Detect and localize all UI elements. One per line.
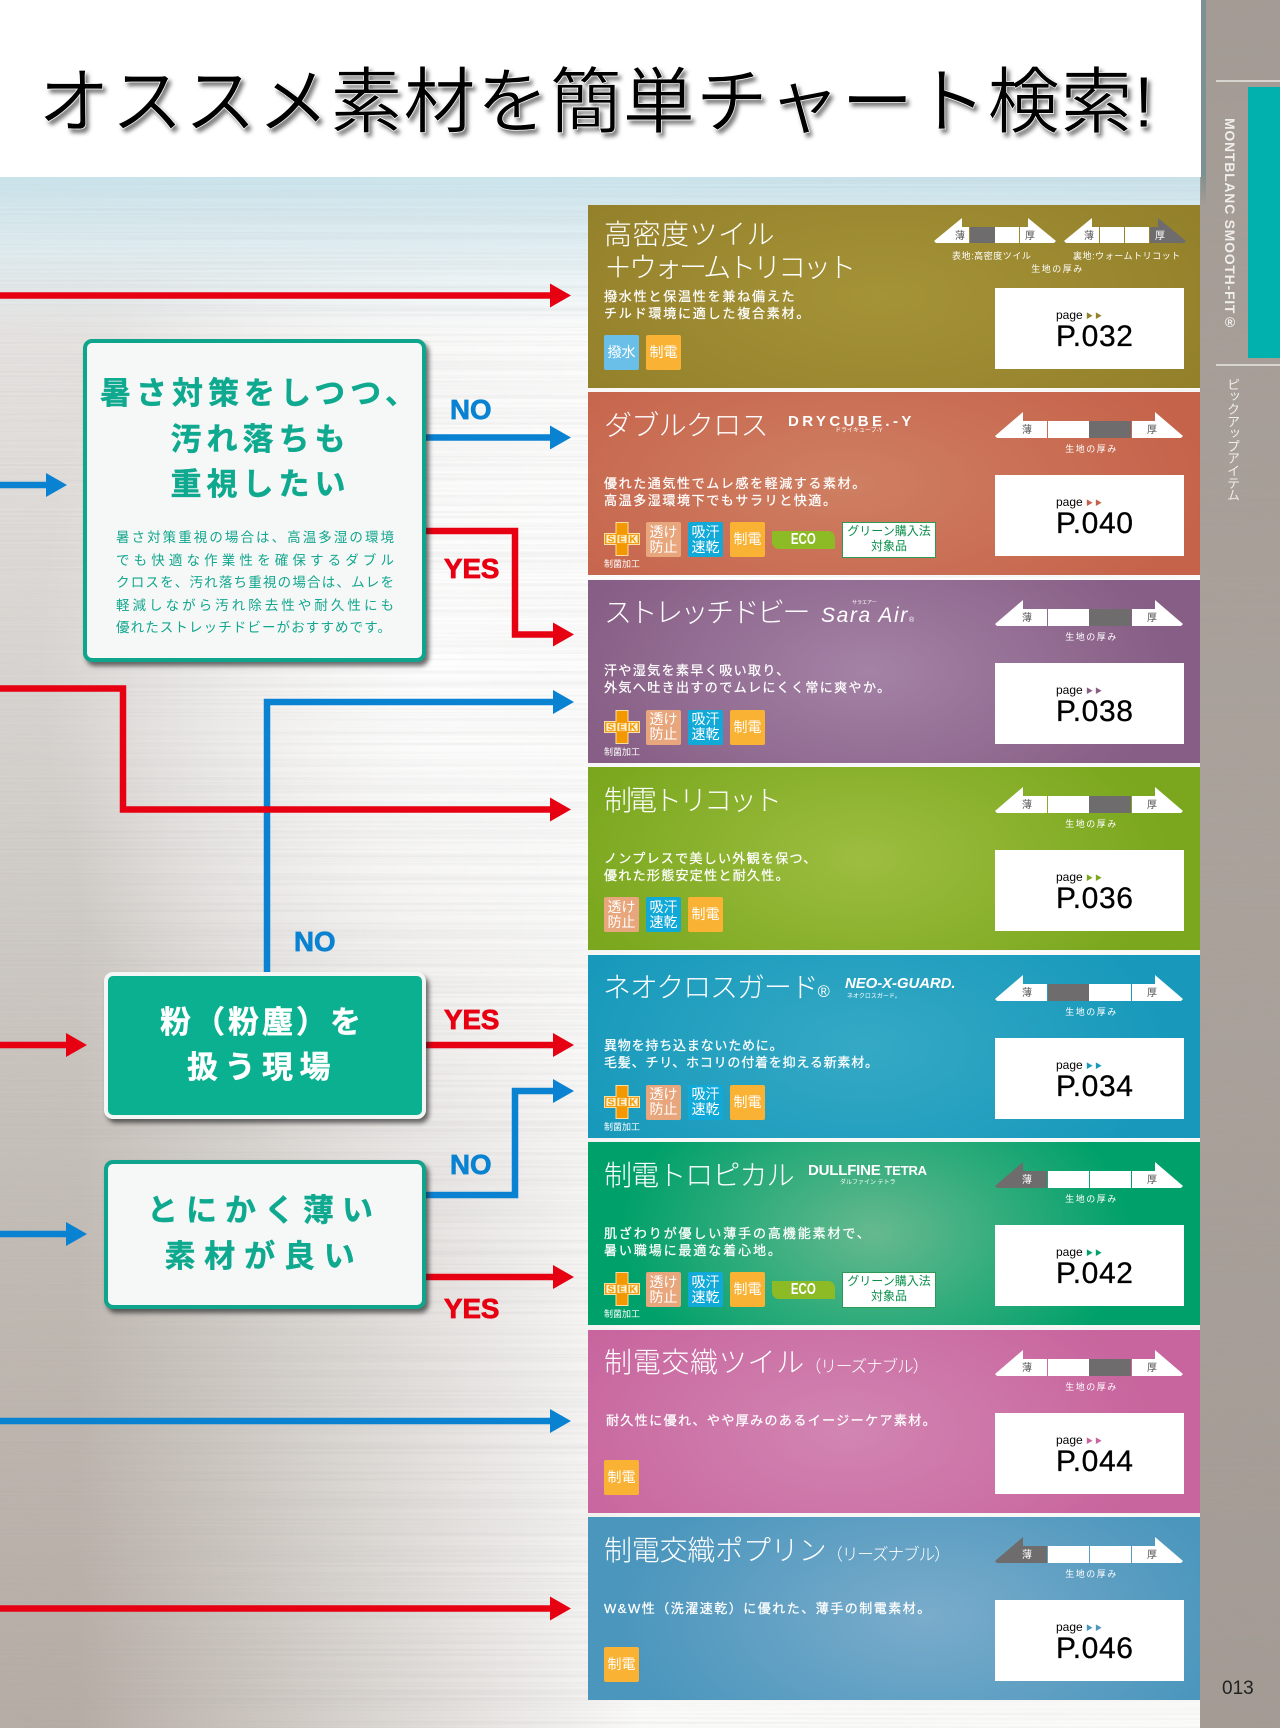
description: 外気へ吐き出すのでムレにくく常に爽やか。 — [604, 680, 891, 695]
ECO tag: ECO — [791, 531, 816, 548]
thickness caption: 生地の厚み — [1065, 1007, 1118, 1017]
moisture wicking tag: 吸汗 — [692, 1086, 720, 1102]
dust question text: 扱う現場 — [187, 1050, 337, 1085]
antistatic tag — [730, 522, 765, 557]
page reference: P.046 — [1056, 1632, 1134, 1665]
thickness meter: 厚 — [1147, 424, 1157, 436]
description: 肌ざわりが優しい薄手の高機能素材で、 — [604, 1226, 872, 1241]
description: 異物を持ち込まないために。 — [604, 1038, 783, 1053]
antistatic tag: 制電 — [608, 1469, 636, 1485]
moisture wicking tag: 速乾 — [692, 1289, 720, 1305]
question explanation: でも快適な作業性を確保するダブル — [116, 553, 394, 568]
SEK mark: S — [608, 1097, 615, 1108]
thickness caption: 生地の厚み — [1065, 1194, 1118, 1204]
green purchasing tag — [842, 1272, 936, 1308]
panel: double cloth — [588, 392, 1200, 575]
arrow: NO up to stretch dobby: NO — [294, 926, 336, 957]
moisture wicking tag: 速乾 — [692, 539, 720, 555]
moisture wicking tag: 吸汗 — [692, 524, 720, 540]
description: 毛髪、チリ、ホコリの付着を抑える新素材。 — [604, 1055, 879, 1070]
arrow: blue into thin question — [0, 1222, 87, 1246]
thickness meter — [995, 412, 1183, 438]
page reference: P.040 — [1056, 507, 1134, 540]
antistatic tag — [604, 1460, 639, 1495]
arrow: YES to static tropical — [426, 1265, 574, 1324]
panel: static interwoven poplin — [588, 1517, 1200, 1700]
thickness meter: face: 厚 — [1025, 230, 1035, 242]
see-through prevention tag — [646, 710, 681, 745]
SEK mark: S — [608, 535, 615, 546]
water repellent tag: 撥水 — [608, 344, 636, 360]
thickness meter: 薄 — [1022, 986, 1032, 999]
thickness meter: 厚 — [1147, 987, 1157, 999]
see-through prevention tag: 透け — [650, 711, 678, 727]
description: W&W性（洗濯速乾）に優れた、薄手の制電素材。 — [604, 1600, 932, 1616]
page reference: page ▶▶ — [1056, 495, 1104, 509]
arrow: red to static tricot — [0, 688, 571, 822]
see-through prevention tag — [604, 897, 639, 932]
page reference: P.032 — [1056, 320, 1134, 353]
antistatic tag: 制電 — [608, 1656, 636, 1672]
panel: static tropical — [588, 1142, 1200, 1325]
thickness caption: 生地の厚み — [1065, 1569, 1118, 1579]
antistatic tag: 制電 — [650, 344, 678, 360]
dust question text: 粉（粉塵）を — [160, 1005, 364, 1040]
panel: static interwoven twill — [588, 1330, 1200, 1513]
NEO-X-GUARD katakana: ネオクロスガード。 — [847, 994, 901, 1000]
antistatic tag: 制電 — [734, 719, 762, 735]
description: 優れた形態安定性と耐久性。 — [604, 868, 790, 883]
thickness meter: 薄 — [1022, 611, 1032, 624]
page reference — [995, 1225, 1184, 1306]
ECO tag: ECO — [791, 1281, 816, 1298]
SEK mark: E — [619, 1097, 626, 1108]
antistatic tag — [604, 1647, 639, 1682]
SEK mark — [604, 522, 640, 569]
meter captions: 表地:高密度ツイル — [952, 251, 1031, 261]
description — [604, 476, 867, 508]
see-through prevention tag: 透け — [650, 1086, 678, 1102]
page reference: page ▶▶ — [1056, 1245, 1104, 1259]
page reference: page ▶▶ — [1056, 308, 1104, 322]
arrow: red to interwoven poplin — [0, 1596, 571, 1620]
SEK mark: K — [629, 1097, 637, 1108]
DULLFINE katakana: ダルファイン テトラ — [840, 1180, 896, 1186]
side label: pick-up items: ピックアップアイテム — [1225, 378, 1240, 501]
DRYCUBE katakana: ドライキューブ-Y — [835, 428, 883, 434]
moisture wicking tag: 吸汗 — [650, 899, 678, 915]
page reference: page ▶▶ — [1056, 1620, 1104, 1634]
SEK mark: K — [629, 535, 637, 546]
NEO-X-GUARD logo: NEO-X-GUARD. — [845, 975, 955, 992]
thickness meter — [995, 1162, 1183, 1188]
arrow: YES to neo cross guard — [426, 1004, 574, 1057]
moisture wicking tag: 吸汗 — [692, 1274, 720, 1290]
thickness meter: 厚 — [1147, 799, 1157, 811]
side label: series name: MONTBLANC SMOOTH-FIT® — [1222, 118, 1238, 331]
fabric name: 制電交織ツイル（リーズナブル） — [604, 1347, 928, 1378]
title: オススメ素材を簡単チャート検索! — [38, 63, 1155, 143]
thickness meter — [995, 975, 1183, 1001]
thickness meter: face: 薄 — [955, 229, 965, 242]
page reference: page ▶▶ — [1056, 1433, 1104, 1447]
SEK mark: 制菌加工 — [604, 747, 640, 757]
question box: thin fabric — [104, 1160, 426, 1309]
arrow: YES to neo cross guard: YES — [444, 1004, 499, 1035]
moisture wicking tag: 吸汗 — [692, 711, 720, 727]
description: チルド環境に適した複合素材。 — [604, 306, 811, 320]
SEK mark: S — [608, 722, 615, 733]
panel: stretch dobby — [588, 580, 1200, 763]
SEK mark: E — [619, 722, 626, 733]
page reference: P.036 — [1056, 882, 1134, 915]
arrow: blue to interwoven twill — [0, 1409, 571, 1433]
thickness meter: back — [1064, 218, 1186, 243]
description: 汗や湿気を素早く吸い取り、 — [604, 663, 791, 678]
thickness meter: 厚 — [1147, 612, 1157, 624]
description: 暑い職場に最適な着心地。 — [604, 1243, 783, 1258]
thickness meter — [995, 1350, 1183, 1376]
thickness meter: 薄 — [1022, 1173, 1032, 1186]
thin fabric question text — [147, 1193, 381, 1274]
Sara Air katakana: サラエアー — [852, 600, 877, 606]
moisture wicking tag — [688, 522, 723, 557]
green purchasing tag — [842, 522, 936, 558]
page reference: P.034 — [1056, 1070, 1134, 1103]
meter captions: 裏地:ウォームトリコット — [1073, 251, 1181, 261]
meter captions — [952, 251, 1181, 261]
moisture wicking tag — [688, 1085, 723, 1120]
see-through prevention tag: 透け — [608, 899, 636, 915]
arrow: NO to double cloth: NO — [450, 394, 492, 425]
question heading: 汚れ落ちも — [170, 422, 350, 456]
thickness meter — [995, 600, 1183, 626]
see-through prevention tag: 防止 — [650, 726, 678, 742]
description — [604, 1226, 872, 1258]
page reference — [995, 663, 1184, 744]
antistatic tag — [688, 897, 723, 932]
question box: dust — [104, 972, 426, 1119]
fabric name: 高密度ツイル — [604, 219, 775, 250]
moisture wicking tag — [688, 1272, 723, 1307]
antistatic tag — [646, 335, 681, 370]
moisture wicking tag: 速乾 — [650, 914, 678, 930]
fabric name: ネオクロスガード® — [603, 972, 829, 1003]
question heading: 暑さ対策をしつつ、 — [100, 376, 421, 411]
dust question text — [160, 1005, 364, 1085]
thickness meter: 厚 — [1147, 1549, 1157, 1561]
SEK mark: K — [629, 1285, 637, 1296]
green purchasing tag: 対象品 — [871, 539, 907, 553]
SEK mark: K — [629, 722, 637, 733]
side column — [1200, 0, 1280, 1728]
description: 撥水性と保温性を兼ね備えた — [604, 288, 796, 304]
moisture wicking tag: 速乾 — [692, 1101, 720, 1117]
SEK mark: 制菌加工 — [604, 1122, 640, 1132]
thickness meter: 薄 — [1022, 1361, 1032, 1374]
thickness caption: 生地の厚み — [1065, 444, 1118, 454]
DULLFINE TETRA logo: DULLFINE TETRA — [808, 1162, 927, 1179]
antistatic tag: 制電 — [734, 1094, 762, 1110]
thickness meter — [995, 1537, 1183, 1563]
thickness meter: 薄 — [1022, 1548, 1032, 1561]
arrow: NO to neo cross guard: NO — [450, 1149, 492, 1180]
thickness caption: 生地の厚み — [1031, 264, 1084, 274]
fabric name: 制電トロピカル — [604, 1160, 794, 1191]
water repellent tag — [604, 335, 639, 370]
moisture wicking tag: 速乾 — [692, 726, 720, 742]
ECO tag — [772, 1281, 835, 1299]
thin fabric question text: 素材が良い — [164, 1238, 364, 1274]
question explanation: 軽減しながら汚れ除去性や耐久性にも — [116, 598, 394, 613]
description — [604, 851, 818, 883]
question explanation: 優れたストレッチドビーがおすすめです。 — [116, 620, 392, 635]
SEK mark: S — [608, 1285, 615, 1296]
thickness meter — [995, 787, 1183, 813]
page reference — [995, 288, 1184, 369]
page reference: P.038 — [1056, 695, 1134, 728]
thickness caption: 生地の厚み — [1065, 632, 1118, 642]
page reference — [995, 1413, 1184, 1494]
description — [604, 1038, 879, 1070]
thickness meter: 薄 — [1022, 798, 1032, 811]
arrow: YES to stretch dobby — [426, 531, 574, 646]
question explanation: クロスを、汚れ落ち重視の場合は、ムレを — [116, 575, 394, 590]
page reference — [995, 1600, 1184, 1681]
thin fabric question text: とにかく薄い — [147, 1193, 381, 1228]
SEK mark: E — [619, 1285, 626, 1296]
arrow: NO to double cloth — [426, 394, 571, 450]
panel: static tricot — [588, 767, 1200, 950]
antistatic tag: 制電 — [692, 906, 720, 922]
see-through prevention tag — [646, 1272, 681, 1307]
page reference — [995, 850, 1184, 931]
thickness caption: 生地の厚み — [1065, 1382, 1118, 1392]
arrow: red to high-density twill — [0, 284, 571, 308]
SEK mark — [604, 1085, 640, 1132]
moisture wicking tag — [688, 710, 723, 745]
SEK mark: 制菌加工 — [604, 1309, 640, 1319]
page reference — [995, 475, 1184, 556]
description: 優れた通気性でムレ感を軽減する素材。 — [604, 476, 867, 491]
panel: high density twill + warm tricot — [588, 205, 1200, 388]
antistatic tag — [730, 710, 765, 745]
SEK mark: 制菌加工 — [604, 559, 640, 569]
see-through prevention tag: 防止 — [608, 914, 636, 930]
ECO tag — [772, 531, 835, 549]
thickness caption: 生地の厚み — [1065, 819, 1118, 829]
Sara Air logo: Sara Air® — [821, 604, 916, 627]
arrow: NO up to stretch dobby — [267, 690, 574, 972]
thickness meter: 厚 — [1147, 1174, 1157, 1186]
DRYCUBE logo: DRYCUBE.-Y — [788, 413, 915, 430]
see-through prevention tag: 防止 — [650, 1289, 678, 1305]
green purchasing tag: 対象品 — [871, 1289, 907, 1303]
arrow: red into dust question — [0, 1033, 87, 1057]
fabric name: ストレッチドビー — [604, 597, 808, 628]
arrow: NO to neo cross guard — [426, 1079, 574, 1195]
description: 耐久性に優れ、やや厚みのあるイージーケア素材。 — [606, 1413, 937, 1428]
arrow: YES to static tropical: YES — [444, 1293, 499, 1324]
thickness meter: back: 薄 — [1084, 229, 1094, 242]
see-through prevention tag: 透け — [650, 524, 678, 540]
page reference: page ▶▶ — [1056, 1058, 1104, 1072]
question explanation — [116, 530, 394, 635]
page reference: page ▶▶ — [1056, 683, 1104, 697]
question heading: 重視したい — [170, 467, 350, 502]
page reference: P.042 — [1056, 1257, 1134, 1290]
moisture wicking tag — [646, 897, 681, 932]
description — [604, 663, 891, 695]
SEK mark — [604, 710, 640, 757]
see-through prevention tag: 透け — [650, 1274, 678, 1290]
antistatic tag: 制電 — [734, 531, 762, 547]
description — [604, 288, 811, 320]
question heading — [100, 376, 421, 502]
thickness meter: 薄 — [1022, 423, 1032, 436]
page number: 013 — [1222, 1678, 1254, 1699]
page reference: page ▶▶ — [1056, 870, 1104, 884]
arrow: blue into heat question — [0, 473, 67, 497]
page reference — [995, 1038, 1184, 1119]
question explanation: 暑さ対策重視の場合は、高温多湿の環境 — [116, 530, 394, 545]
page reference: P.044 — [1056, 1445, 1134, 1478]
SEK mark — [604, 1272, 640, 1319]
antistatic tag: 制電 — [734, 1281, 762, 1297]
see-through prevention tag — [646, 522, 681, 557]
title band — [0, 0, 1201, 177]
green purchasing tag: グリーン購入法 — [847, 1274, 931, 1288]
see-through prevention tag: 防止 — [650, 1101, 678, 1117]
description: 高温多湿環境下でもサラリと快適。 — [604, 493, 838, 508]
side rule and teal tab — [1216, 80, 1280, 366]
fabric name: 制電交織ポプリン（リーズナブル） — [604, 1534, 950, 1566]
panel: neo cross guard — [588, 955, 1200, 1138]
question box: heat and stains — [83, 339, 426, 662]
thickness meter: face — [934, 218, 1056, 243]
green purchasing tag: グリーン購入法 — [847, 524, 931, 538]
antistatic tag — [730, 1085, 765, 1120]
fabric name: ＋ウォームトリコット — [604, 252, 853, 283]
thickness meter: 厚 — [1147, 1362, 1157, 1374]
fabric name — [604, 219, 853, 283]
fabric name: 制電トリコット — [604, 785, 779, 816]
arrow: YES to stretch dobby: YES — [444, 553, 499, 584]
description: ノンプレスで美しい外観を保つ、 — [604, 851, 818, 866]
SEK mark: E — [619, 535, 626, 546]
fabric name: ダブルクロス — [604, 410, 768, 441]
see-through prevention tag: 防止 — [650, 539, 678, 555]
antistatic tag — [730, 1272, 765, 1307]
see-through prevention tag — [646, 1085, 681, 1120]
thickness meter: back: 厚 — [1155, 230, 1165, 242]
